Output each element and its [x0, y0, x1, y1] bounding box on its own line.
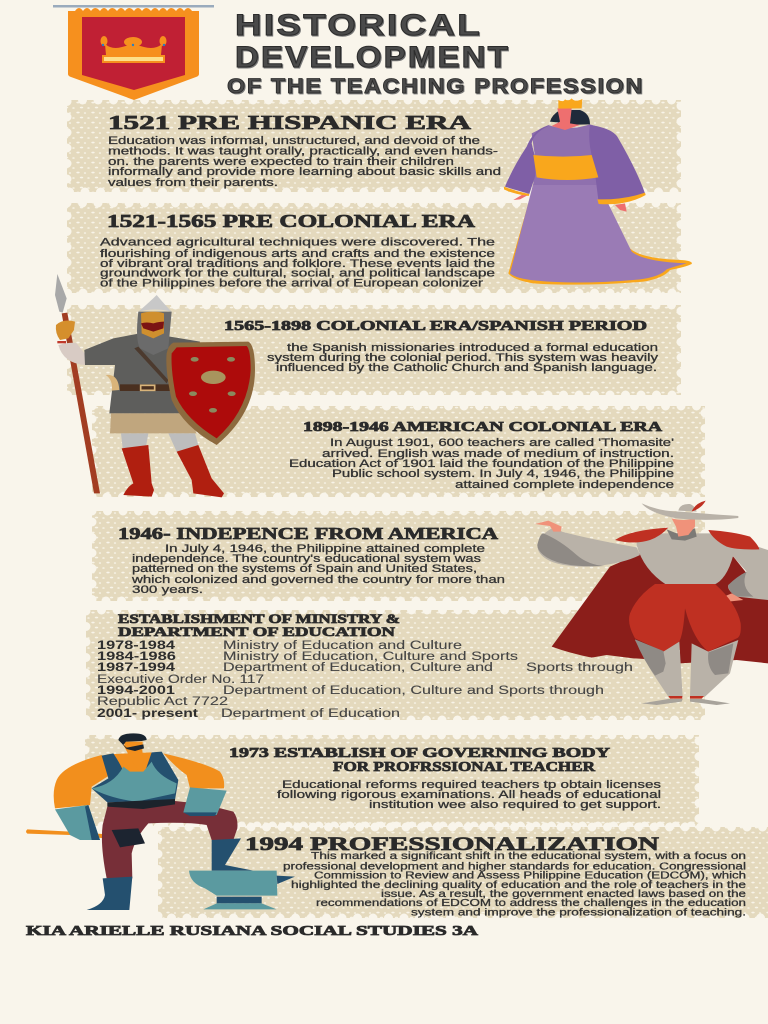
timeline list: 2001- present	[97, 708, 198, 720]
panel: 1521 pre hispanic era	[67, 100, 681, 192]
title: OF THE TEACHING PROFESSION	[227, 75, 644, 98]
illustration: warrior with spear and shield	[55, 274, 255, 497]
text block: pre colonial era: flourishing of indigenous arts and crafts and the existence	[100, 248, 495, 260]
text block: american colonial era: Public school system. In July 4, 1946, the Philippine	[332, 468, 674, 480]
text block: pre colonial era: Advanced agricultural techniques were discovered. The	[100, 236, 495, 248]
heading: colonial era spanish period: 1565-1898 COLONIAL ERA/SPANISH PERIOD	[224, 318, 647, 333]
title: DEVELOPMENT	[235, 41, 510, 74]
text block: professionalization: highlighted the declining quality of education and the role of teachers in the	[291, 880, 747, 891]
text block: pre hispanic era: on. the parents were expected to train their children	[108, 156, 454, 168]
illustration: blacksmith with hammer and anvil	[26, 733, 295, 910]
text block: professionalization: professional development and higher standards for education. Congressional	[283, 862, 746, 872]
heading: professionalization: 1994 PROFESSIONALIZATION	[245, 834, 659, 855]
text block: governing body: Educational reforms required teachers tp obtain licenses	[282, 779, 662, 791]
text block: pre hispanic era: Education was informal, unstructured, and devoid of the	[108, 135, 480, 147]
timeline list: Sports through	[526, 662, 633, 674]
timeline list: Republic Act 7722	[97, 696, 228, 708]
heading: 1521 pre hispanic era: 1521 PRE HISPANIC ERA	[108, 112, 472, 134]
footer: author: KIA ARIELLE RUSIANA SOCIAL STUDIES 3A	[26, 923, 478, 938]
text block: pre colonial era: groundwork for the cultural, social, and political landscape	[100, 268, 495, 280]
heading: ministry and department	[118, 611, 400, 639]
heading: pre colonial era: 1521-1565 PRE COLONIAL ERA	[107, 211, 475, 231]
panel: independence from america	[92, 511, 705, 601]
timeline list: 1984-1986	[97, 651, 176, 663]
text block: pre colonial era: of the Philippines before the arrival of European colonizer	[100, 278, 483, 290]
text block: american colonial era: Education Act of 1901 laid the foundation of the Philippine	[289, 458, 674, 470]
icon: crown	[100, 36, 166, 63]
banner with crown	[53, 5, 214, 100]
text block: independence: independence. The country's educational system was	[132, 553, 482, 565]
timeline list: 1978-1984	[97, 640, 176, 652]
text block: independence: In July 4, 1946, the Philippine attained complete	[165, 543, 485, 555]
heading: ministry and department: DEPARTMENT OF EDUCATION	[118, 624, 396, 639]
text block: american colonial era: In August 1901, 600 teachers are called 'Thomasite'	[330, 437, 674, 449]
text block: independence: which colonized and governed the country for more than	[131, 574, 505, 586]
panel: governing body	[85, 735, 699, 826]
text block: pre colonial era	[100, 236, 495, 290]
timeline list: Department of Education, Culture and Sports through	[223, 685, 604, 697]
illustration: spanish conquistador	[535, 501, 768, 705]
timeline list: 1987-1994	[97, 662, 176, 674]
text block: spanish period: system during the colonial period. This system was heavily	[267, 352, 659, 364]
panel: american colonial era	[92, 406, 705, 497]
text block: professionalization: issue. As a result, the government enacted laws based on the	[381, 889, 747, 900]
timeline list: Department of Education, Culture and	[223, 662, 493, 674]
timeline list: 1994-2001	[97, 685, 176, 697]
timeline list: Ministry of Education, Culture and Sports	[223, 651, 518, 663]
panel: professionalization	[158, 827, 768, 918]
timeline list: Ministry of Education and Culture	[223, 640, 462, 652]
text block: professionalization: This marked a significant shift in the educational system, with a focus on	[311, 851, 746, 862]
panel: colonial era spanish period	[67, 305, 681, 395]
text block: professionalization: recommendations of EDCOM to address the challenges in the education	[316, 898, 746, 909]
text block: governing body	[277, 779, 662, 811]
heading: governing body: 1973 ESTABLISH OF GOVERNING BODY	[229, 745, 610, 760]
text block: independence: patterned on the systems of Spain and United States,	[132, 563, 477, 575]
text block: governing body: following rigorous examinations. All heads of educational	[277, 789, 661, 801]
text block: pre colonial era: of vibrant oral traditions and folklore. These events laid the	[100, 258, 495, 270]
text block: pre hispanic era	[108, 135, 501, 189]
text block: professionalization: Commission to Review and Assess Philippine Education (EDCOM), which	[314, 870, 746, 882]
heading: governing body	[229, 745, 610, 774]
text block: spanish period: the Spanish missionaries introduced a formal education	[287, 342, 658, 354]
text block: spanish period	[267, 342, 659, 374]
text block: governing body: institution wee also required to get support.	[369, 799, 661, 811]
text block: pre hispanic era: methods. It was taught orally, practically, and even hands-	[108, 146, 498, 158]
text block: professionalization	[283, 851, 747, 918]
heading: ministry and department: ESTABLISHMENT OF MINISTRY &	[118, 611, 400, 626]
illustration: queen	[504, 98, 692, 285]
panel: 1521-1565 pre colonial era	[67, 203, 681, 293]
panel: ministry and department of education	[86, 610, 705, 720]
title: HISTORICAL	[235, 9, 482, 42]
heading: independence from america: 1946- INDEPENCE FROM AMERICA	[118, 524, 499, 543]
text block: independence: 300 years.	[132, 584, 203, 596]
heading: governing body: FOR PROFRSSIONAL TEACHER	[333, 759, 595, 774]
text block: independence	[131, 543, 505, 596]
timeline list: Department of Education	[221, 708, 400, 720]
timeline list: Executive Order No. 117	[97, 674, 264, 686]
text block: american colonial era: arrived. English was made of medium of instruction.	[322, 448, 674, 460]
text block: professionalization: system and improve the professionalization of teaching.	[411, 908, 746, 918]
heading: american colonial era: 1898-1946 AMERICAN COLONIAL ERA	[303, 419, 662, 434]
text block: spanish period: influenced by the Catholic Church and Spanish language.	[276, 362, 657, 374]
text block: pre hispanic era: values from their parents.	[108, 177, 278, 189]
timeline list	[97, 640, 633, 720]
text block: pre hispanic era: informally and provide more learning about basic skills and	[108, 166, 501, 178]
title	[227, 9, 644, 98]
text block: american colonial era	[289, 437, 674, 491]
text block: american colonial era: attained complete independence	[455, 479, 674, 491]
